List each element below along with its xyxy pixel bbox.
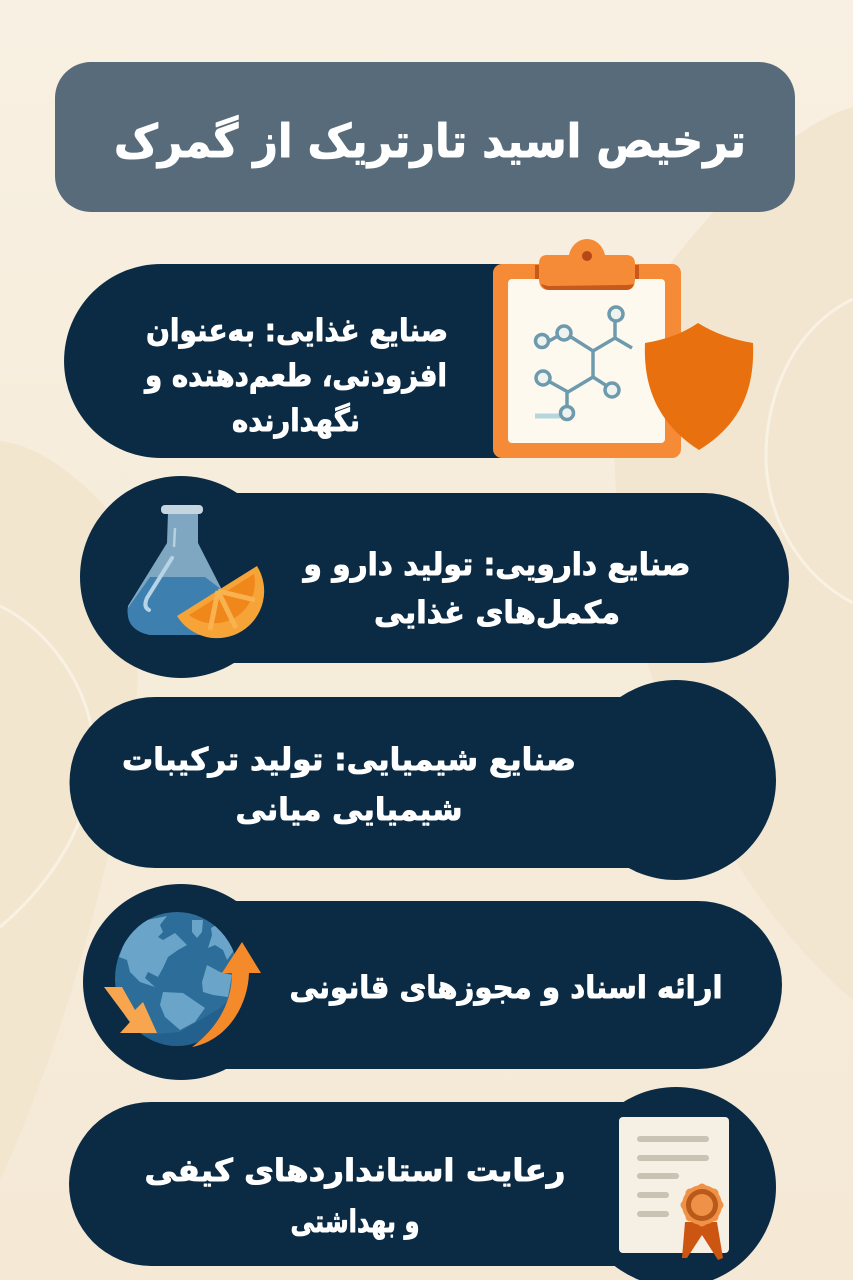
- text: food industries: صنایع غذایی: به‌عنوان: [146, 313, 448, 349]
- icon: globe with arrows: [104, 912, 261, 1050]
- text: chemical industries: [122, 742, 576, 828]
- icon: certificate with seal: [619, 1117, 729, 1260]
- title banner: [55, 62, 795, 212]
- panel: quality and hygiene standards: [69, 1087, 776, 1280]
- text: food industries: افزودنی، طعم‌دهنده و: [143, 358, 447, 394]
- panel: pharmaceutical industries: [80, 476, 789, 678]
- text: pharmaceutical industries: صنایع دارویی: تولید دارو و: [302, 547, 690, 583]
- panel: chemical industries: [70, 680, 776, 880]
- text: legal documents: ارائه اسناد و مجوزهای قانونی: [290, 970, 722, 1006]
- panel: legal documents: [83, 884, 782, 1080]
- text: pharmaceutical industries: [302, 547, 690, 631]
- icon: clipboard with molecule and shield: [493, 239, 753, 458]
- icon: flask and orange slice: [128, 505, 264, 638]
- text: quality and hygiene standards: [144, 1153, 566, 1240]
- text: pharmaceutical industries: مکمل‌های غذایی: [374, 595, 620, 631]
- panel: food industries: [64, 239, 753, 458]
- text: quality and hygiene standards: رعایت استانداردهای کیفی: [144, 1153, 566, 1189]
- text: food industries: نگهدارنده: [232, 402, 360, 439]
- title: ترخیص اسید تارتریک از گمرک: [114, 114, 746, 168]
- text: quality and hygiene standards: و بهداشتی: [290, 1204, 420, 1240]
- text: food industries: [143, 313, 448, 439]
- text: chemical industries: صنایع شیمیایی: تولید ترکیبات: [122, 742, 576, 778]
- text: chemical industries: شیمیایی میانی: [236, 792, 462, 828]
